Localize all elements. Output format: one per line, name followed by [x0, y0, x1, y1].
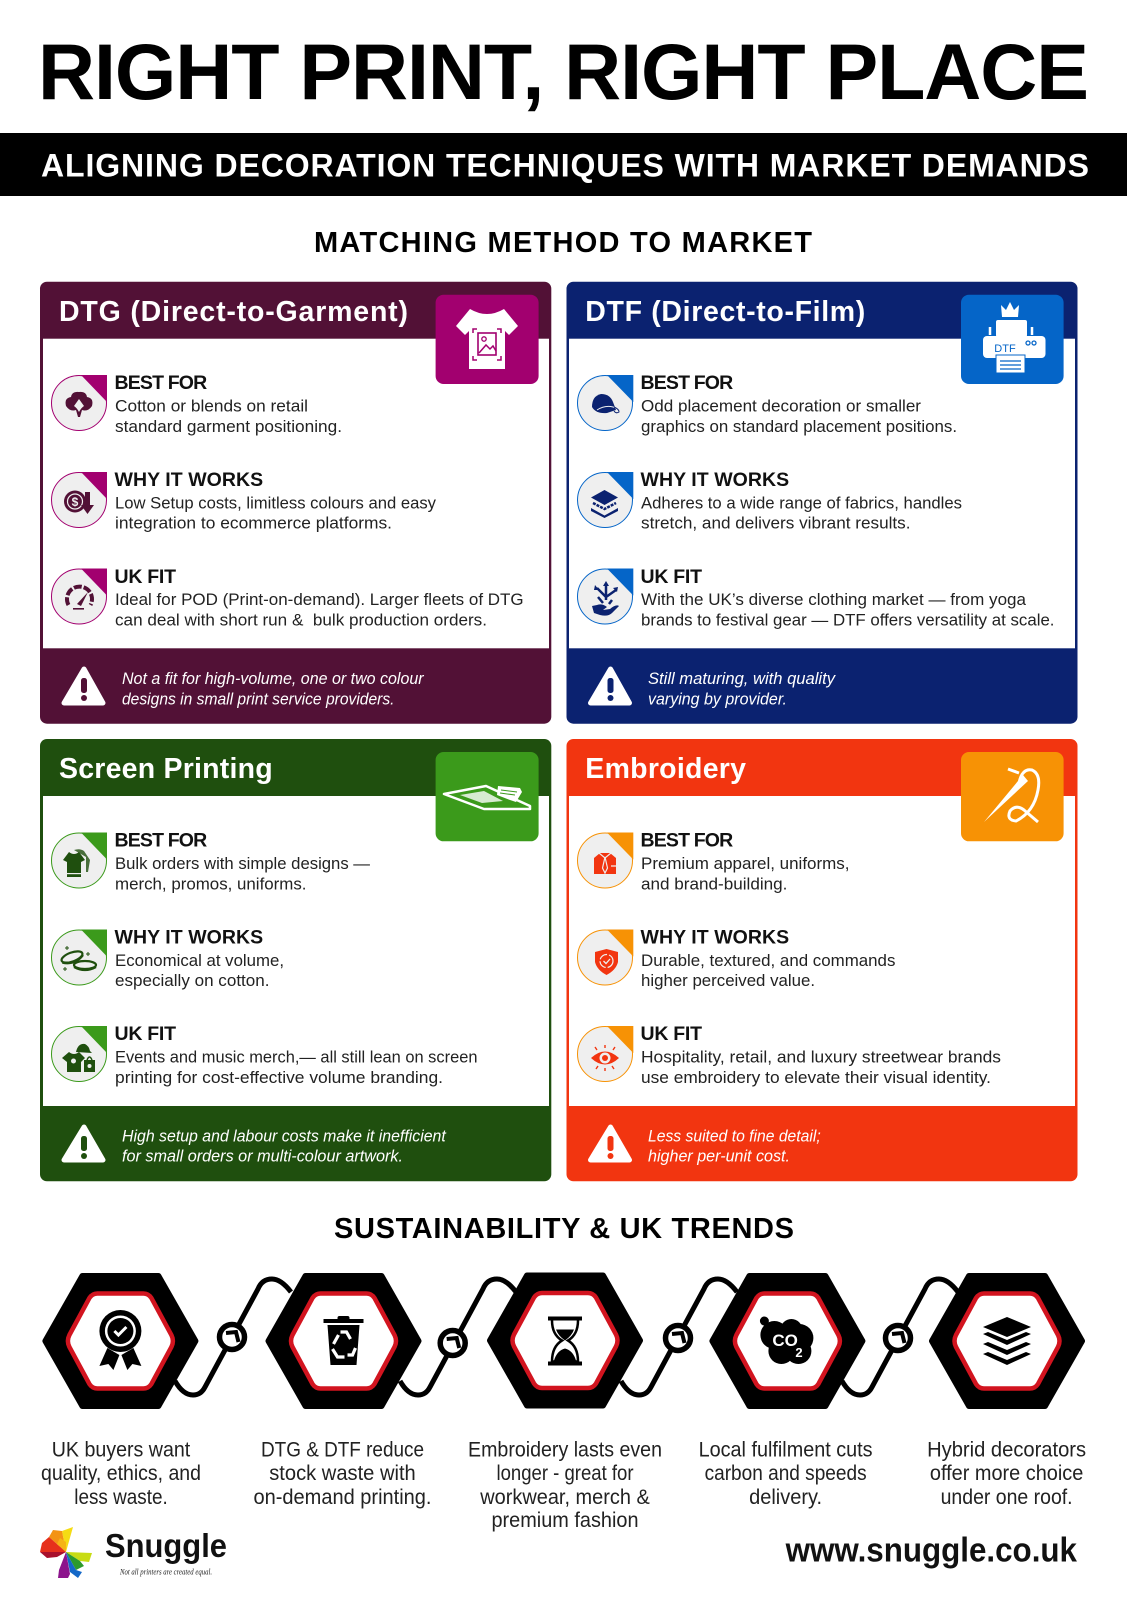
item: best for: Odd placement decoration or smaller — [641, 397, 921, 416]
icon: coin with down arrow: $ — [72, 495, 79, 509]
callout: embroidery caution: higher per-unit cost. — [648, 1147, 790, 1166]
item: best for — [578, 372, 957, 436]
item: why it works: integration to ecommerce platforms. — [115, 514, 392, 533]
item: best for: Bulk orders with simple designs — — [115, 854, 370, 873]
hexagon with CO2 cloud icon: CO — [772, 1331, 798, 1350]
step 4: local fulfilment — [699, 1276, 873, 1509]
caption: Hybrid decorators — [927, 1439, 1086, 1462]
step 3: durability — [468, 1276, 662, 1532]
callout: DTG caution: Not a fit for high-volume, one or two colour — [122, 669, 425, 688]
item: UK fit: With the UK’s diverse clothing market — from yoga — [641, 590, 1027, 609]
caption — [927, 1439, 1086, 1509]
icon: jacket and tie — [578, 832, 633, 888]
hexagon with hourglass icon — [490, 1276, 640, 1406]
logo: Snuggle — [40, 1527, 227, 1578]
callout: DTG caution — [64, 669, 425, 708]
item: why it works: stretch, and delivers vibrant results. — [641, 514, 910, 533]
caption: under one roof. — [941, 1486, 1073, 1509]
step 2: stock waste — [254, 1276, 432, 1509]
callout: screen printing caution: for small orders or multi-colour artwork. — [122, 1147, 403, 1166]
icon: DTF printer — [961, 295, 1064, 384]
item: UK fit: printing for cost-effective volume branding. — [115, 1068, 443, 1087]
icon: hand with arrows — [578, 568, 633, 624]
icon: cap — [578, 375, 633, 430]
item: why it works: especially on cotton. — [115, 971, 270, 990]
item: why it works: WHY IT WORKS — [114, 469, 263, 491]
icon: DTF printer: DTF — [994, 343, 1016, 355]
logo: Snuggle: Not all printers are created equal. — [119, 1568, 212, 1576]
callout: screen printing caution: High setup and labour costs make it inefficient — [122, 1126, 447, 1145]
item: best for: and brand-building. — [641, 874, 787, 894]
callout: DTG caution: designs in small print service providers. — [122, 689, 394, 708]
section heading: sustainability and UK trends: SUSTAINABILITY & UK TRENDS — [334, 1213, 794, 1245]
item: why it works: WHY IT WORKS — [640, 469, 789, 491]
caption: UK buyers want — [52, 1439, 190, 1462]
title: RIGHT PRINT, RIGHT PLACE — [38, 27, 1089, 116]
icon: shield — [578, 930, 633, 985]
icon: coins — [52, 930, 107, 985]
item: best for — [52, 830, 370, 894]
icon: pinwheel — [40, 1527, 92, 1578]
item: best for — [578, 830, 850, 894]
hexagon with CO2 cloud icon: 2 — [795, 1345, 803, 1360]
item: UK fit: Ideal for POD (Print-on-demand). Larger fleets of DTG — [115, 590, 524, 609]
caption — [468, 1439, 662, 1532]
caption — [254, 1439, 432, 1509]
step 5: hybrid decorators — [927, 1276, 1086, 1509]
item: why it works — [52, 926, 284, 990]
subtitle banner — [0, 133, 1127, 196]
panel: DTF — [566, 282, 1078, 724]
icon: cotton — [52, 375, 107, 430]
item: UK fit: UK FIT — [114, 566, 176, 588]
item: UK fit — [52, 566, 524, 630]
callout: DTF caution: varying by provider. — [648, 689, 787, 708]
website url: www.snuggle.co.uk — [785, 1532, 1077, 1570]
hexagon with rosette icon — [45, 1276, 195, 1406]
step 1: quality — [41, 1276, 201, 1509]
icon: warning — [64, 1127, 103, 1160]
panel: Embroidery — [566, 739, 1078, 1181]
item: why it works — [52, 469, 436, 533]
connector 1 — [175, 1279, 291, 1395]
connector 2 — [400, 1279, 516, 1395]
caption: Local fulfilment cuts — [699, 1439, 873, 1462]
icon: coin with down arrow — [52, 472, 107, 528]
panel: DTG — [40, 282, 551, 724]
item: why it works: higher perceived value. — [641, 971, 815, 990]
caption: less waste. — [74, 1486, 168, 1509]
section heading: matching method to market: MATCHING METHOD TO MARKET — [314, 227, 812, 259]
item: why it works: WHY IT WORKS — [114, 926, 263, 948]
icon: eye — [578, 1026, 633, 1082]
icon: warning — [64, 669, 103, 703]
icon: speedometer — [52, 568, 107, 624]
caption: longer - great for — [496, 1462, 634, 1485]
caption: DTG & DTF reduce — [261, 1439, 424, 1462]
heading: Embroidery: Embroidery — [585, 753, 746, 785]
callout: screen printing caution — [64, 1126, 447, 1166]
caption: premium fashion — [492, 1509, 638, 1532]
heading: Screen Printing: Screen Printing — [59, 753, 273, 785]
item: best for — [52, 372, 342, 436]
item: why it works — [578, 469, 962, 533]
item: best for: Cotton or blends on retail — [115, 397, 308, 416]
hexagon with layers icon — [932, 1276, 1082, 1406]
item: UK fit: UK FIT — [640, 566, 702, 588]
icon: warning — [590, 1127, 630, 1160]
hexagon with recycling bin icon — [268, 1276, 418, 1406]
caption — [699, 1439, 873, 1509]
icon: printed t-shirt — [436, 295, 539, 384]
item: why it works: WHY IT WORKS — [640, 926, 789, 948]
item: UK fit — [52, 1023, 478, 1087]
callout: DTF caution: Still maturing, with quality — [648, 669, 836, 688]
item: best for: BEST FOR — [114, 830, 207, 852]
item: why it works: Economical at volume, — [115, 951, 284, 970]
item: UK fit: brands to festival gear — DTF offers versatility at scale. — [641, 611, 1054, 630]
caption: offer more choice — [930, 1462, 1083, 1485]
item: UK fit: use embroidery to elevate their visual identity. — [641, 1068, 991, 1087]
item: best for: BEST FOR — [640, 830, 733, 852]
item: UK fit: UK FIT — [114, 1023, 176, 1045]
icon: fabric layers — [578, 472, 633, 528]
item: why it works: Durable, textured, and commands — [641, 951, 895, 970]
item: best for: merch, promos, uniforms. — [115, 874, 306, 894]
icon: warning — [590, 669, 630, 703]
caption: Embroidery lasts even — [468, 1439, 662, 1462]
heading: DTG: DTG (Direct-to-Garment) — [59, 296, 408, 328]
icon: screen printing frame — [436, 752, 539, 841]
connector 3 — [621, 1279, 737, 1395]
item: UK fit: Hospitality, retail, and luxury streetwear brands — [641, 1048, 1001, 1066]
item: best for: BEST FOR — [640, 372, 733, 394]
item: UK fit: can deal with short run & bulk production orders. — [115, 611, 487, 630]
connector 4 — [842, 1279, 958, 1395]
caption — [41, 1439, 201, 1509]
item: best for: Premium apparel, uniforms, — [641, 854, 850, 873]
heading: DTF: DTF (Direct-to-Film) — [585, 296, 865, 328]
caption: carbon and speeds — [705, 1462, 867, 1485]
callout: DTF caution — [590, 669, 836, 708]
subtitle banner: ALIGNING DECORATION TECHNIQUES WITH MARKET DEMANDS — [41, 148, 1089, 184]
item: UK fit — [578, 1023, 1001, 1087]
caption: workwear, merch & — [479, 1486, 650, 1509]
item: UK fit: UK FIT — [640, 1023, 702, 1045]
item: best for: graphics on standard placement positions. — [641, 417, 957, 436]
callout: embroidery caution — [590, 1126, 821, 1166]
item: why it works — [578, 926, 895, 990]
panel: Screen Printing — [40, 739, 551, 1181]
item: best for: standard garment positioning. — [115, 417, 342, 436]
caption: delivery. — [749, 1486, 822, 1509]
item: why it works: Adheres to a wide range of fabrics, handles — [641, 493, 962, 512]
caption: on-demand printing. — [254, 1486, 432, 1509]
hexagon with CO2 cloud icon — [712, 1276, 862, 1406]
icon: stacked t-shirts — [52, 832, 107, 888]
logo: Snuggle: Snuggle — [105, 1527, 227, 1564]
item: UK fit — [578, 566, 1054, 630]
caption: stock waste with — [269, 1462, 416, 1485]
caption: quality, ethics, and — [41, 1462, 201, 1485]
item: UK fit: Events and music merch,— all still lean on screen — [115, 1048, 478, 1066]
item: best for: BEST FOR — [114, 372, 207, 394]
icon: needle and thread — [961, 752, 1064, 841]
item: why it works: Low Setup costs, limitless colours and easy — [115, 493, 436, 512]
callout: embroidery caution: Less suited to fine detail; — [648, 1126, 821, 1145]
icon: merch shirt, cap and bag — [52, 1026, 107, 1082]
